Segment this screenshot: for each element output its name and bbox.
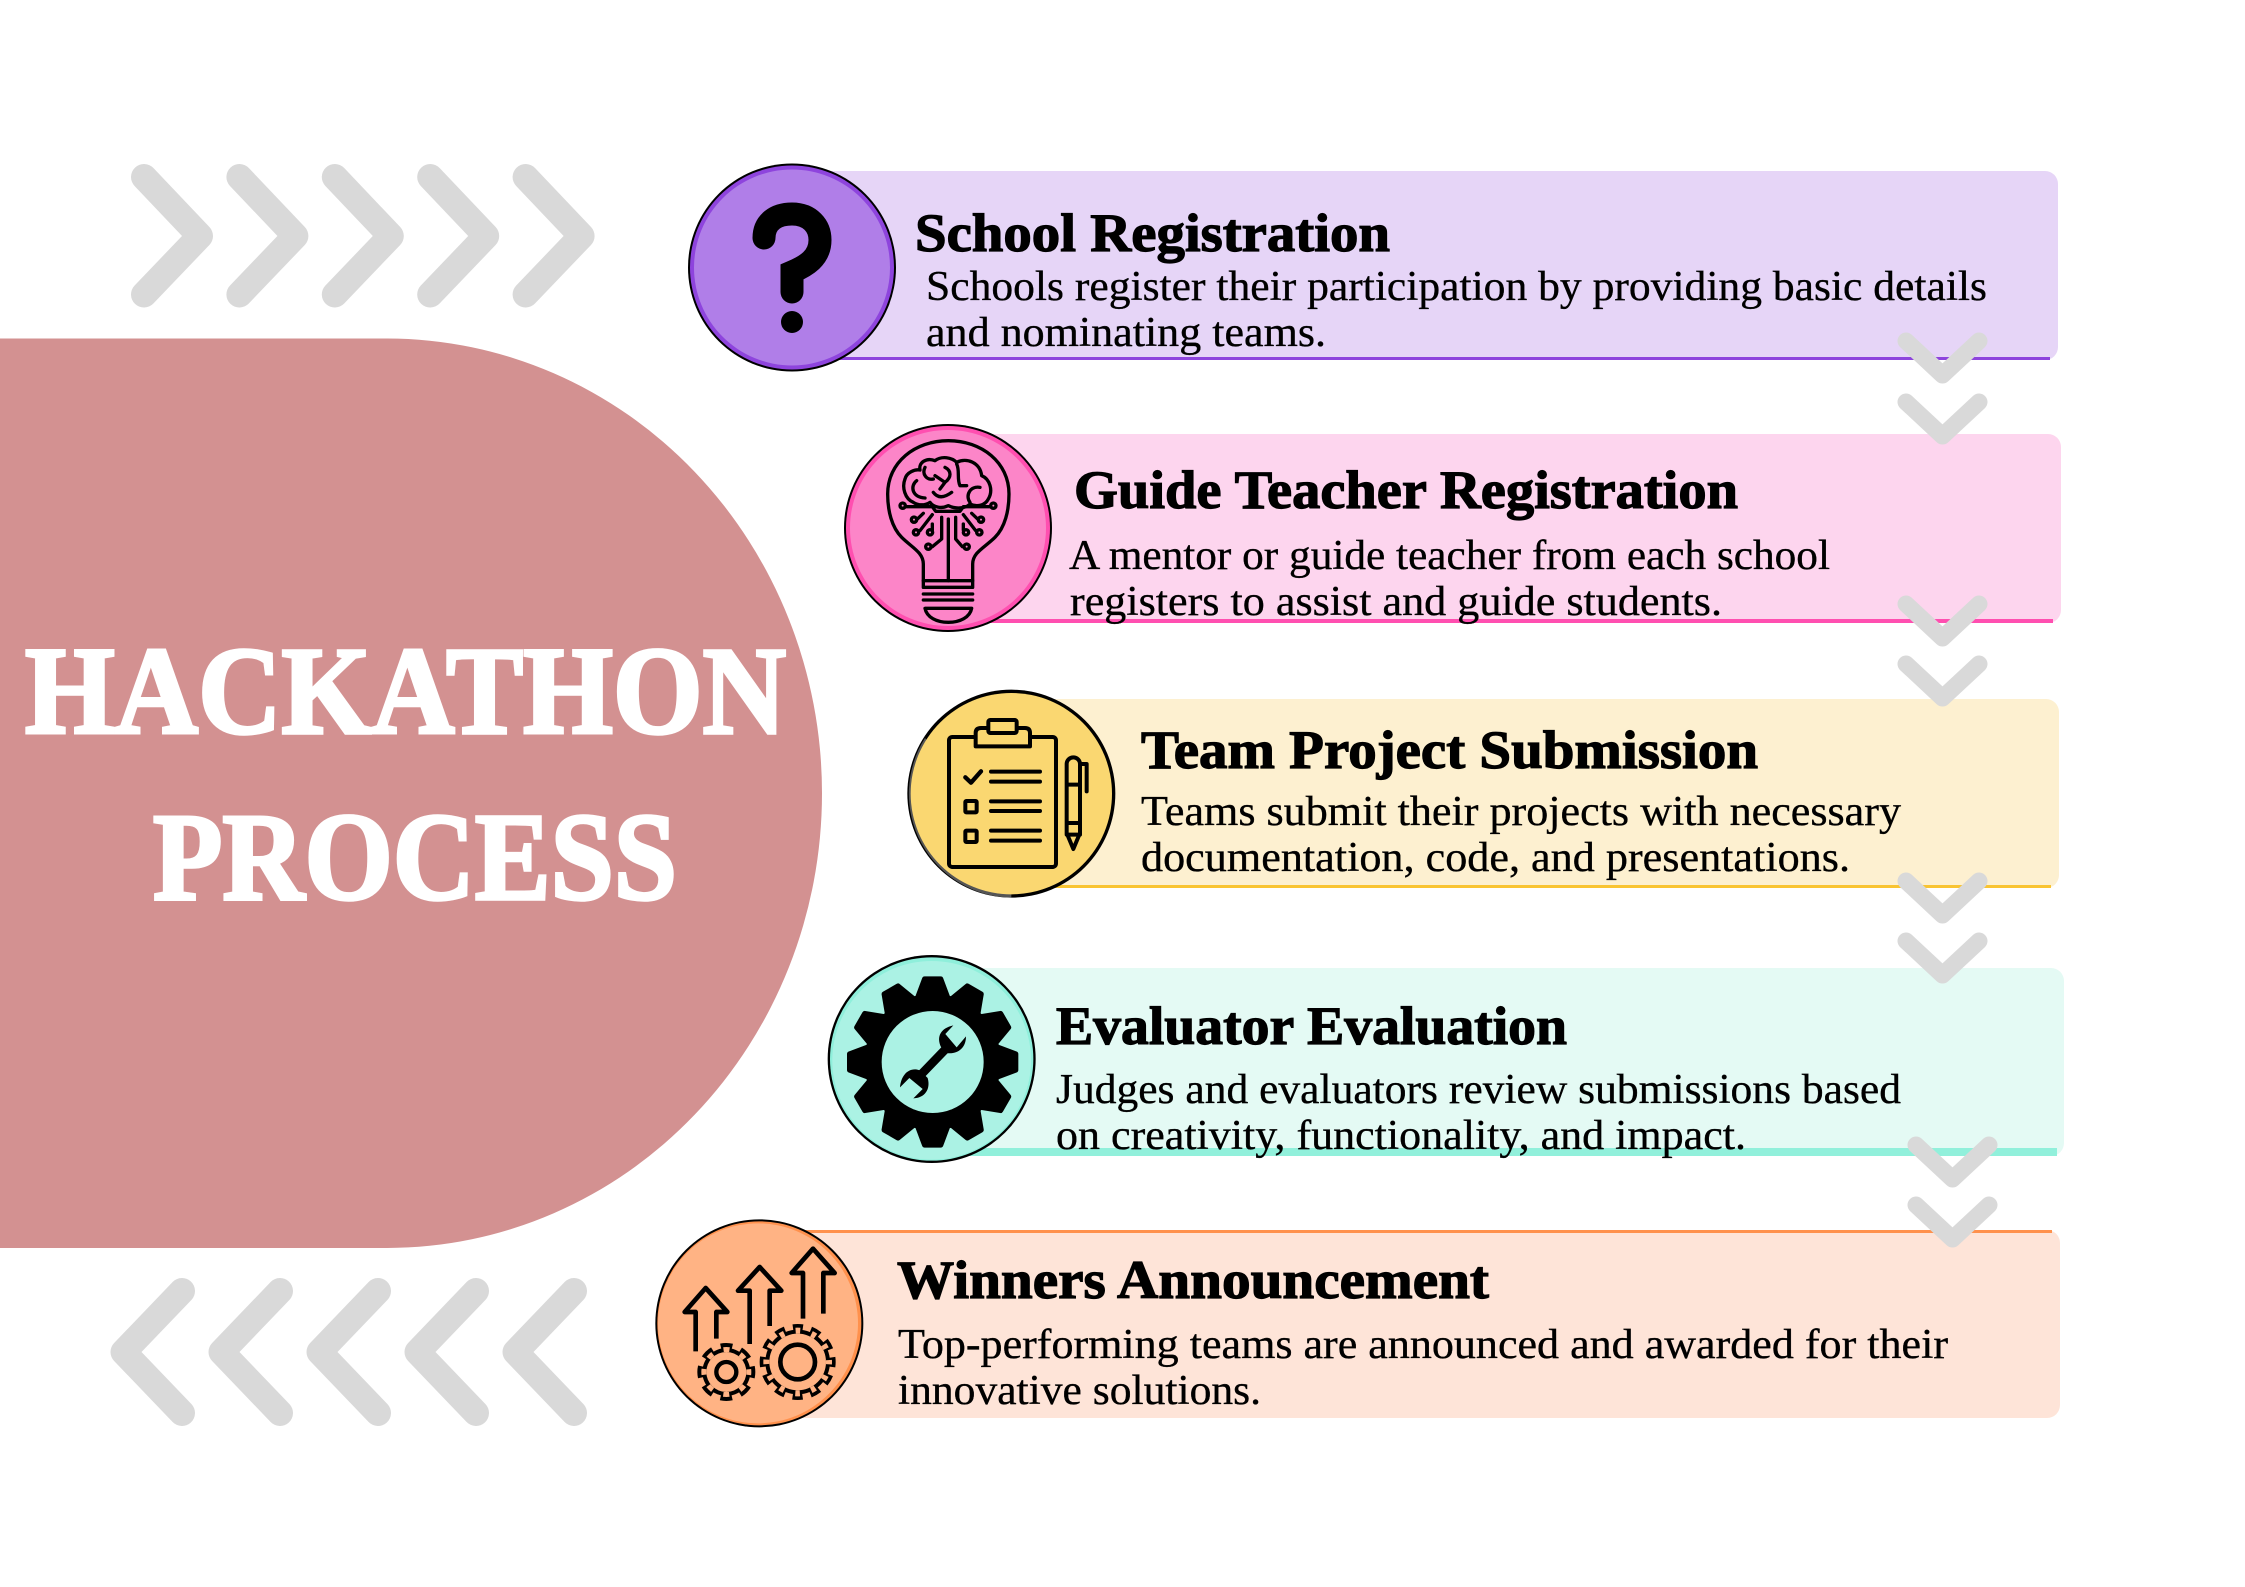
bottom decorative chevron row (124, 1291, 574, 1413)
panel: team project submission (907, 690, 2059, 898)
heading: Winners Announcement (897, 1250, 1489, 1310)
icon: brain light bulb circle (844, 424, 1052, 632)
arrow: down chevrons from step 4 to step 5 (1916, 1145, 1989, 1239)
description: Schools register their participation by providing basic details (926, 264, 1987, 310)
description: and nominating teams. (926, 310, 1326, 356)
description (1056, 1067, 1901, 1159)
description (898, 1322, 1948, 1414)
large gear (763, 1327, 832, 1397)
arrow: down chevrons from step 2 to step 3 (1906, 604, 1979, 698)
heading: Guide Teacher Registration (1074, 460, 1738, 520)
icon: clipboard checklist circle (907, 690, 1115, 898)
description: Judges and evaluators review submissions based (1056, 1067, 1901, 1113)
icon: rising arrows and gears circle (655, 1219, 863, 1427)
description (1141, 789, 1901, 881)
description (926, 264, 1987, 356)
panel: winners announcement (655, 1219, 2060, 1427)
small gear (701, 1347, 752, 1397)
description: A mentor or guide teacher from each school (1069, 533, 1830, 579)
heading: Evaluator Evaluation (1056, 996, 1567, 1056)
icon: gear and wrench circle (828, 955, 1036, 1163)
title: PROCESS (153, 789, 677, 927)
description: Top-performing teams are announced and awarded for their (898, 1322, 1948, 1368)
description: documentation, code, and presentations. (1141, 835, 1850, 881)
description: Teams submit their projects with necessary (1141, 789, 1901, 835)
title (25, 623, 786, 927)
panel: hackathon title semicircle (0, 338, 822, 1248)
panel: school registration (688, 164, 2058, 372)
heading: Team Project Submission (1141, 720, 1758, 780)
arrow: down chevrons from step 3 to step 4 (1906, 881, 1979, 975)
description: on creativity, functionality, and impact. (1056, 1113, 1746, 1159)
panel: evaluator evaluation (828, 955, 2064, 1163)
title: HACKATHON (25, 623, 786, 761)
icon: question mark circle (688, 164, 896, 372)
arrow: down chevrons from step 1 to step 2 (1906, 341, 1979, 436)
description (1069, 533, 1830, 625)
heading: School Registration (915, 203, 1390, 263)
top decorative chevron row (144, 177, 582, 294)
panel: guide teacher registration (844, 424, 2061, 632)
description: innovative solutions. (898, 1368, 1261, 1414)
description: registers to assist and guide students. (1070, 579, 1722, 625)
